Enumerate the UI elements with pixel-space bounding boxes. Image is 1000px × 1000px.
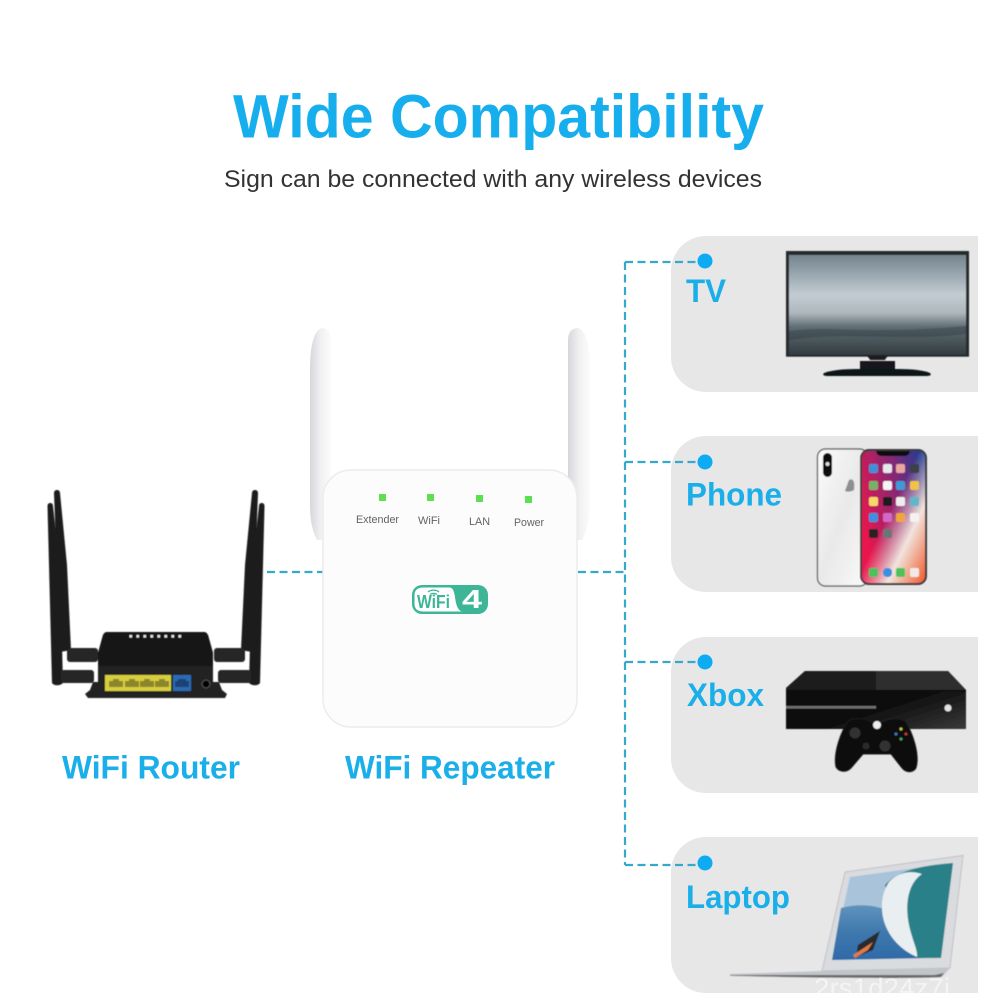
icon: game controller (835, 719, 917, 772)
repeater body (323, 470, 577, 727)
icon: television (786, 251, 969, 376)
panel: TV (671, 236, 978, 392)
label: WiFi Router: WiFi Router (62, 750, 240, 786)
label: TV: TV (686, 273, 727, 309)
repeater indicator labels: WiFi (418, 515, 440, 527)
repeater indicator labels: LAN (469, 516, 490, 528)
repeater indicator lights (379, 494, 532, 503)
icon: WiFi repeater (310, 328, 590, 727)
repeater indicator labels: Extender (356, 514, 399, 526)
label: Laptop: Laptop (686, 879, 790, 915)
icon: smartphone (818, 449, 927, 586)
WiFi 4 badge (412, 584, 488, 614)
panel: Phone (671, 436, 978, 592)
connector dot: Laptop (698, 856, 712, 870)
router power jack (202, 680, 210, 688)
connector dot: TV (698, 254, 712, 268)
label: Xbox: Xbox (687, 677, 764, 713)
label: Phone: Phone (686, 476, 782, 512)
label: WiFi Repeater: WiFi Repeater (345, 750, 555, 786)
repeater indicator labels: Power (514, 517, 544, 529)
router body (85, 632, 227, 698)
router connectors (61, 648, 251, 683)
repeater indicator labels (356, 514, 544, 529)
subtitle: Sign can be connected with any wireless devices (224, 166, 762, 193)
router WAN port (173, 675, 191, 691)
connector lines (267, 262, 700, 865)
repeater antennas (310, 328, 331, 540)
icon: WiFi router (48, 490, 264, 698)
connector dot: Xbox (698, 654, 712, 670)
icon: laptop (730, 856, 963, 978)
WiFi 4 badge: WiFi (417, 592, 450, 612)
panel: Laptop (671, 837, 978, 993)
WiFi 4 badge: 4 (462, 584, 483, 614)
icon: game console (786, 671, 966, 772)
router LAN ports (105, 675, 171, 691)
title: Wide Compatibility (233, 82, 764, 150)
router status lights (130, 635, 181, 638)
panel: Xbox (671, 637, 978, 793)
router antennas (48, 490, 264, 685)
connector dot: Phone (698, 454, 712, 470)
